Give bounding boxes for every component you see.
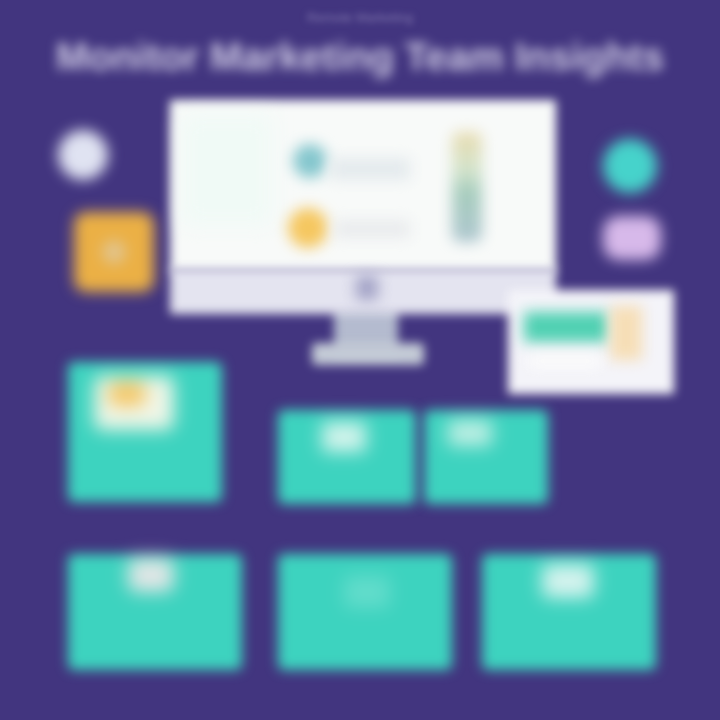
teal card 1 xyxy=(68,362,222,502)
light line xyxy=(528,354,602,368)
teal card 5 xyxy=(278,554,452,670)
peach chip xyxy=(610,306,642,360)
icon: lilac pill xyxy=(603,216,661,260)
icon: orange rounded square xyxy=(74,212,154,292)
card badge xyxy=(322,422,366,452)
title: Monitor Marketing Team Insights xyxy=(56,36,664,79)
floating card xyxy=(500,282,682,402)
teal card 3 xyxy=(424,410,548,504)
teal chip xyxy=(524,312,608,342)
monitor bezel xyxy=(170,268,556,314)
monitor stand base xyxy=(312,343,424,365)
teal screen dot xyxy=(293,144,327,178)
text lines xyxy=(330,158,410,180)
monitor stand xyxy=(334,305,398,355)
teal card 6 xyxy=(482,554,656,670)
vertical bar chart xyxy=(452,132,482,242)
card badge xyxy=(448,420,492,446)
orange screen dot xyxy=(288,208,328,248)
green screen tint xyxy=(182,115,272,225)
teal card 2 xyxy=(278,410,416,504)
icon: teal circle xyxy=(603,139,657,193)
text lines lower xyxy=(334,220,410,238)
card badge xyxy=(94,376,174,430)
monitor logo xyxy=(356,276,378,300)
monitor xyxy=(162,92,564,372)
teal card 4 xyxy=(68,554,242,670)
icon: pale circle xyxy=(58,130,108,180)
subtitle: Remote Marketing xyxy=(307,10,413,25)
card badge xyxy=(128,558,174,592)
card badge xyxy=(344,576,390,608)
monitor screen xyxy=(170,100,556,272)
card badge xyxy=(542,564,594,598)
card background xyxy=(508,290,674,394)
